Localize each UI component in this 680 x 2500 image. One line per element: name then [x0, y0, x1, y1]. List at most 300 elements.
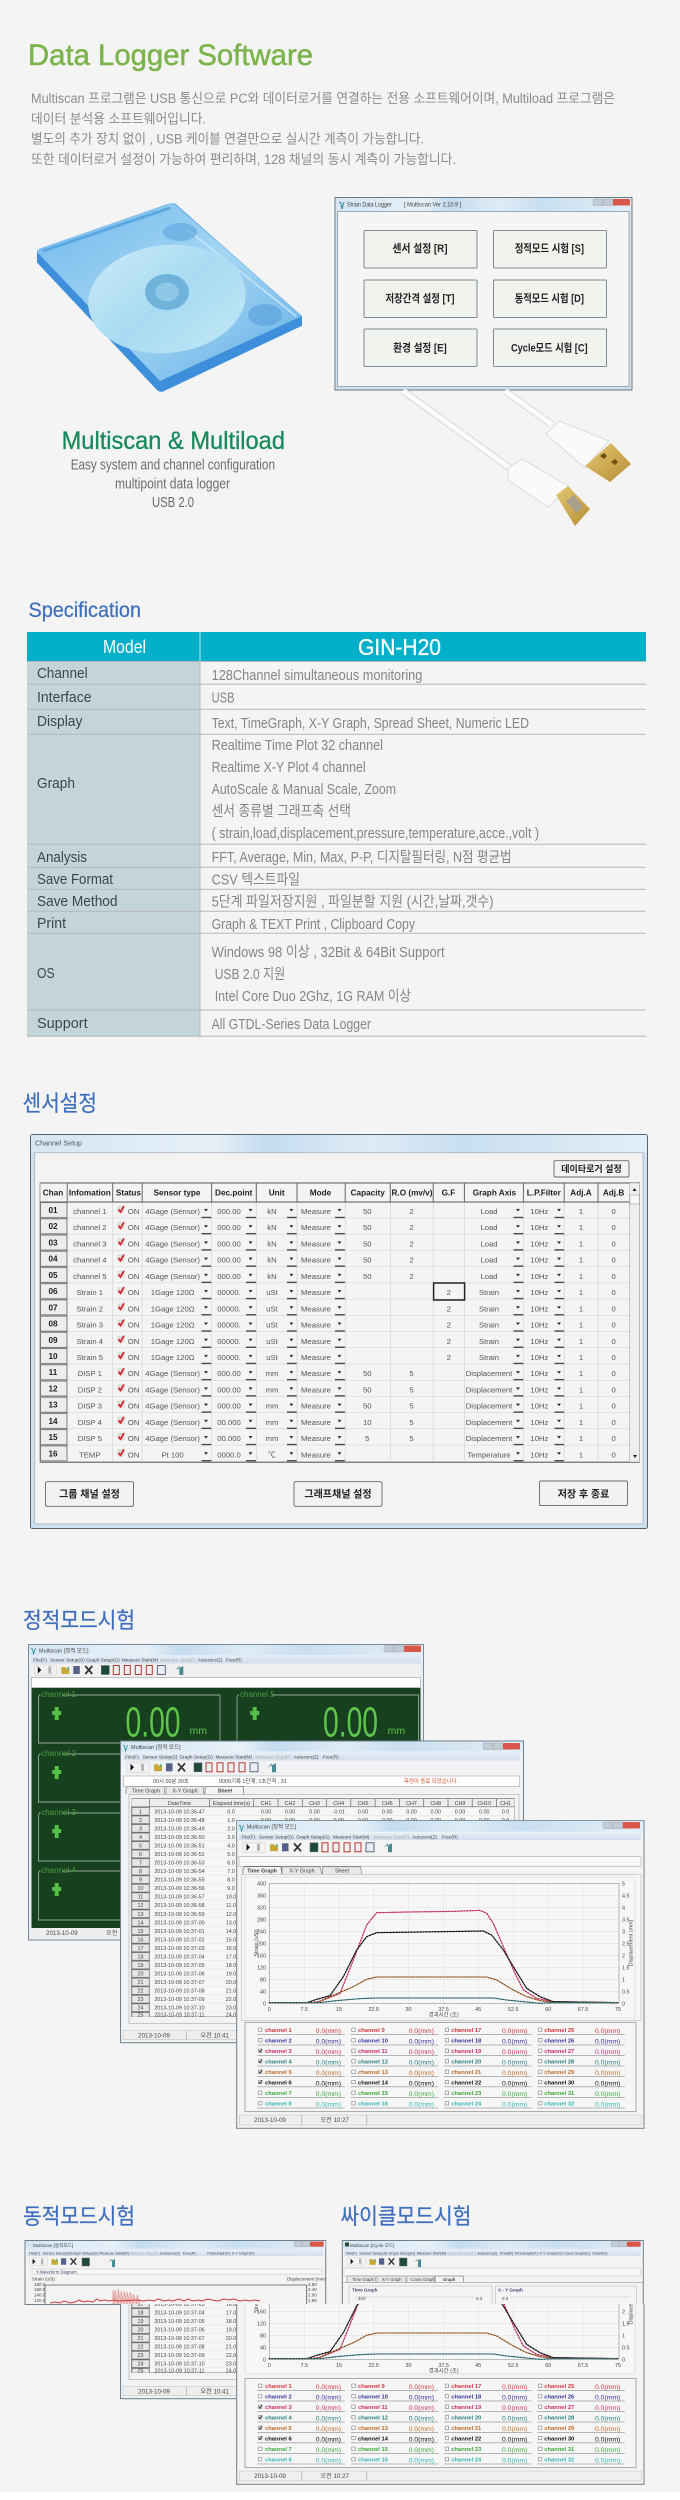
channel rows: 4Gage (Sensor) [145, 1207, 200, 1216]
channel values: 0.0(mm) [316, 2091, 341, 2098]
title bar: Multiscan [정적 모드] [39, 1648, 89, 1654]
table header row: Adj.A [570, 1189, 592, 1198]
sheet header: CH7 [406, 1801, 417, 1807]
channel values: 0.0(mm) [502, 2447, 527, 2454]
channel numbers: 14 [48, 1417, 58, 1426]
sheet rows: 0.00 [285, 1809, 295, 1815]
status bar: 2013-10-09 [138, 2032, 170, 2040]
right axis labels: 0 [622, 2001, 625, 2007]
sheet rows: 12 [138, 1903, 144, 1909]
row labels: Print [37, 916, 66, 932]
channel names: channel 5 [265, 2070, 293, 2076]
channel values: 0.0(mm) [595, 2028, 620, 2035]
left axis labels: 240 [257, 1929, 266, 1935]
menu bar: Measure Start(M) [99, 2251, 130, 2255]
sheet rows: 2013-10-09 10:37-11 [155, 2368, 204, 2374]
row values: All GTDL-Series Data Logger [212, 1017, 371, 1033]
channel names: channel 10 [358, 2038, 388, 2044]
graph group boxes: 0.3 [502, 2296, 509, 2301]
sheet rows: 0.00 [285, 1818, 295, 1824]
channel rows: TEMP [79, 1450, 100, 1459]
status strip: 0000기록 1단계, 1초간격 , 31 [219, 1777, 287, 1785]
right axis labels: 2.5 [622, 1941, 630, 1947]
channel values: 0.0(mm) [409, 2070, 434, 2077]
channel names: channel 18 [451, 2038, 482, 2044]
menu bar: Free(R) [183, 2251, 197, 2255]
left axis labels: 320 [257, 1905, 266, 1911]
channel list panel [245, 2022, 636, 2112]
channel values: 0.0(mm) [409, 2049, 434, 2056]
channel names: channel 5 [240, 1690, 275, 1699]
channel rows: 10Hz [530, 1337, 549, 1346]
channel rows: ON [128, 1304, 139, 1313]
sheet rows: 5.0 [227, 1852, 235, 1858]
channel values: 0.0(mm) [595, 2080, 620, 2087]
right axis labels: 3 [622, 1929, 625, 1935]
channel rows: 10Hz [530, 1288, 549, 1297]
status bar: 오전 10:27 [320, 2472, 350, 2480]
title: Data Logger Software [28, 39, 313, 72]
channel rows: 1 [579, 1304, 583, 1313]
menu bar: Autozero(Z) [294, 1754, 319, 1760]
channel rows: kN [267, 1207, 277, 1216]
sheet rows: 22 [138, 2345, 144, 2351]
heading: sensor setup: 센서설정 [22, 1091, 97, 1116]
toolbar [127, 1762, 276, 1772]
channel values: 0.0(mm) [316, 2028, 341, 2035]
sheet header: CH1 [500, 1801, 511, 1807]
tabs: X-Y Graph [172, 1788, 198, 1794]
channel names: channel 24 [451, 2102, 482, 2108]
sheet rows: 1.0 [227, 1818, 235, 1824]
channel names: channel 24 [451, 2458, 482, 2464]
row labels [37, 666, 118, 1032]
sheet rows: 17 [138, 1946, 144, 1952]
channel rows: 0 [611, 1207, 616, 1216]
x axis labels: 67.5 [578, 2007, 588, 2013]
status strip: 00시 00분 30초 [153, 1778, 189, 1785]
sheet rows: 16.0 [226, 2302, 236, 2308]
sheet rows: 0.00 [382, 1818, 393, 1824]
sheet rows: 17.0 [226, 1954, 236, 1960]
row labels: Channel [37, 666, 88, 682]
channel names [265, 2384, 575, 2464]
channel names: channel 18 [451, 2394, 482, 2400]
row values: 센서 종류별 그래프축 선택 [212, 803, 351, 820]
channel values: 0.0(mm) [316, 2070, 341, 2077]
channel rows: 1Gage 120Ω [151, 1288, 195, 1297]
channel values: 0.0(mm) [502, 2038, 527, 2046]
table header row: Chan [43, 1189, 63, 1198]
channel numbers: 04 [48, 1255, 58, 1264]
sheet rows: 12.0 [226, 1912, 236, 1918]
sheet rows: 2013-10-09 10:37-02 [154, 1937, 205, 1943]
sheet rows: 20 [138, 1972, 144, 1978]
menu bar: Free(R) [442, 1834, 458, 1839]
sheet rows: 4 [139, 1835, 142, 1841]
channel rows: 0 [611, 1385, 616, 1394]
table header row: Status [116, 1189, 141, 1198]
channel rows: 4Gage (Sensor) [145, 1256, 200, 1265]
channel rows: uSt [266, 1337, 279, 1346]
status bar: 2013-10-09 [46, 1930, 78, 1937]
sheet rows: 18.0 [226, 1963, 236, 1969]
channel rows: 2 [447, 1304, 451, 1313]
channel rows: Strain 1 [77, 1288, 103, 1297]
channel rows: Measure [301, 1402, 331, 1411]
channel rows: 00000. [217, 1337, 241, 1346]
y axis title right: Displacement (mm) [629, 1919, 635, 1966]
row values: Realtime Time Plot 32 channel [212, 738, 383, 754]
row labels: Analysis [37, 850, 87, 866]
menu bar [27, 2249, 323, 2256]
channel rows: 2 [409, 1239, 414, 1248]
sheet header: DateTime [168, 1801, 191, 1807]
channel rows: DISP 5 [78, 1434, 102, 1443]
channel names: channel 4 [41, 1866, 77, 1875]
sheet rows: 11.0 [226, 1903, 236, 1909]
channel names: channel 16 [358, 2102, 389, 2108]
menu bar: TimeGraph(T) [207, 2251, 231, 2255]
channel rows: Measure [301, 1288, 331, 1297]
row labels: Save Method [37, 894, 118, 910]
sheet rows: 2013-10-09 10:36-55 [154, 1878, 205, 1884]
channel rows: 50 [363, 1385, 372, 1394]
channel rows: Measure [301, 1353, 331, 1362]
sheet rows: 2013-10-09 10:36-57 [154, 1895, 205, 1901]
waveform axis labels: 160.0 [34, 2287, 46, 2292]
channel names: channel 16 [358, 2458, 389, 2464]
x axis labels: 0 [268, 2007, 271, 2013]
sheet rows: 23 [138, 2353, 144, 2359]
channel rows: Measure [301, 1450, 331, 1459]
row labels: Save Format [37, 872, 113, 888]
product description: USB 2.0 [152, 495, 194, 511]
tabs: Time Graph [247, 1868, 277, 1874]
channel rows: 0 [611, 1353, 616, 1362]
channel rows: Measure [301, 1320, 331, 1330]
sheet panel [129, 1794, 519, 2024]
channel rows: 5 [409, 1418, 414, 1427]
sheet rows: 2013-10-09 10:36-52 [154, 1852, 205, 1858]
sheet rows: 2013-10-09 10:36-49 [154, 1826, 205, 1832]
table header row: Graph Axis [473, 1189, 517, 1198]
sheet rows: 0.0 [502, 1809, 509, 1815]
channel rows: DISP 2 [78, 1385, 102, 1394]
launcher button labels: 동적모드 시험 [D] [515, 291, 584, 305]
row values: Graph & TEXT Print , Clipboard Copy [212, 917, 416, 933]
menu bar: Measure Stop(P) [447, 2251, 477, 2255]
waveform axis labels: 1.60 [308, 2298, 317, 2303]
channel rows: 50 [363, 1369, 372, 1378]
left axis labels: 200 [257, 1941, 266, 1947]
channel values: 0.0(mm) [409, 2394, 434, 2402]
channel rows: DISP 1 [78, 1369, 102, 1378]
channel rows: 10Hz [530, 1402, 549, 1411]
channel values: 0.0(mm) [316, 2436, 341, 2443]
left axis labels: 40 [260, 2345, 266, 2351]
channel rows: Displacement [466, 1418, 513, 1427]
sheet rows: 3 [139, 1826, 142, 1832]
channel rows: Displacement [466, 1402, 513, 1411]
sheet rows: 13.0 [226, 1920, 236, 1926]
table header row: L.P.Filter [527, 1189, 562, 1198]
heading: Specification: Specification [28, 599, 141, 622]
white strip [32, 1678, 420, 1688]
right axis labels: 0.5 [622, 2345, 630, 2351]
row values [212, 668, 539, 1033]
channel rows: Displacement [466, 1385, 513, 1394]
channel rows: Strain [479, 1337, 499, 1346]
channel values: 0.0(mm) [316, 2426, 341, 2433]
y axis title left: Strain (uSt) [254, 1929, 260, 1957]
menu bar: Measure Stop(P) [160, 1657, 196, 1662]
channel names: channel 30 [544, 2436, 574, 2442]
client area [35, 1153, 643, 1524]
waveform axis labels: 120.0 [34, 2298, 46, 2303]
sheet rows: 2013-10-09 10:37-03 [154, 1946, 205, 1952]
sheet rows: 2013-10-09 10:37-08 [154, 2345, 205, 2351]
channel names: channel 19 [451, 2049, 482, 2055]
heading: dynamic mode test: 동적모드시험 [23, 2204, 135, 2229]
channel names: channel 2 [41, 1749, 77, 1758]
channel names: channel 1 [265, 2028, 293, 2034]
channel names: channel 1 [41, 1690, 77, 1699]
channel list panel [245, 2378, 636, 2468]
menu bar: Measure Start(M) [216, 1754, 252, 1760]
launcher client area [338, 212, 629, 386]
channel values: 0.0(mm) [595, 2426, 620, 2433]
channel numbers: 12 [48, 1384, 58, 1393]
channel values: 0.0(mm) [316, 2458, 341, 2464]
channel rows: 10 [363, 1418, 372, 1427]
product name: Multiscan & Multiload [62, 427, 285, 455]
x axis labels: 45 [475, 2007, 481, 2013]
menu bar: Sensor Setup(S) [50, 1657, 85, 1662]
channel rows: 00000. [217, 1288, 241, 1297]
channel numbers: 07 [48, 1303, 58, 1312]
channel values: 0.0(mm) [409, 2447, 434, 2454]
channel rows: 000.00 [217, 1369, 241, 1378]
channel values: 0.0(mm) [502, 2049, 527, 2056]
waveform group box: Displacement (mm) [287, 2276, 327, 2282]
row labels: Support [37, 1016, 88, 1032]
menu bar: Measure Stop(P) [130, 2251, 159, 2255]
intro paragraph: Multiscan 프로그램은 USB 통신으로 PC와 데이터로거를 연결하는 전용 소프트웨어이며, Multiload 프로그램은 [31, 91, 615, 106]
channel rows: ON [128, 1256, 139, 1265]
launcher button labels [386, 241, 588, 354]
channel names: channel 31 [544, 2091, 575, 2097]
sheet rows: 2013-10-09 10:36-53 [154, 1860, 205, 1866]
toolbar [348, 2258, 421, 2267]
channel rows: 0 [611, 1320, 616, 1330]
channel names: channel 3 [265, 2405, 293, 2411]
channel names: channel 31 [544, 2447, 575, 2453]
status bar [239, 2471, 641, 2481]
channel rows: Displacement [466, 1369, 513, 1378]
status bar: 오전 [106, 1929, 118, 1937]
channel values: 0.0(mm) [316, 2060, 341, 2066]
sheet rows: 9.0 [227, 1886, 235, 1892]
x axis labels: 75 [615, 2363, 621, 2369]
sheet rows: 16 [138, 1937, 144, 1943]
menu bar: Free(R) [500, 2251, 514, 2255]
channel numbers: 13 [48, 1401, 58, 1410]
channel rows: 2 [447, 1337, 451, 1346]
sheet rows: 0.00 [455, 1809, 465, 1815]
channel rows: channel 5 [73, 1272, 106, 1281]
channel names: channel 14 [358, 2080, 389, 2086]
x axis labels: 7.5 [300, 2363, 308, 2369]
LED units [190, 1728, 404, 1734]
channel rows: Temperature [467, 1450, 511, 1459]
channel names: channel 7 [265, 2447, 292, 2453]
channel names: channel 26 [544, 2038, 575, 2044]
table header: GIN-H20 [358, 634, 441, 660]
right axis labels: 3.5 [622, 1917, 630, 1923]
sheet rows: 11 [138, 1895, 143, 1901]
table header row: Sensor type [154, 1189, 201, 1198]
channel rows: uSt [266, 1353, 279, 1362]
right axis labels: 4.5 [622, 1893, 630, 1899]
sheet rows: 24.0 [226, 2012, 236, 2018]
channel values: 0.0(mm) [316, 2447, 341, 2454]
channel values: 0.0(mm) [502, 2102, 527, 2108]
channel rows: ON [128, 1272, 139, 1281]
sheet rows: 20 [138, 2328, 144, 2334]
channel names: channel 17 [451, 2028, 481, 2034]
sheet rows: 2013-10-09 10:36-48 [154, 1818, 205, 1824]
channel rows: 1 [579, 1402, 583, 1411]
sheet header: CH3 [309, 1801, 320, 1807]
x axis labels: 22.5 [368, 2007, 379, 2013]
sheet rows: 2013-10-09 10:37-09 [154, 1997, 205, 2003]
menu bar: Measure Start(M) [417, 2251, 447, 2255]
sheet rows: 2013-10-09 10:36-59 [154, 1912, 205, 1918]
x axis title: 경과시간 (초) [429, 2366, 459, 2374]
menu bar: Sensor Setup(S) [43, 2251, 72, 2255]
row labels: Graph [37, 776, 75, 792]
menu bar: Graph Setup(G) [86, 1657, 120, 1662]
channel rows: 2 [409, 1207, 414, 1216]
channel names: channel 2 [265, 2038, 292, 2044]
sheet rows: 2013-10-09 10:37-00 [154, 1920, 205, 1926]
sheet rows: 22 [138, 1989, 144, 1995]
channel rows: Load [480, 1239, 498, 1248]
menu bar: File(F) [346, 2251, 358, 2255]
channel rows: 000.00 [217, 1256, 241, 1265]
channel rows: 10Hz [530, 1272, 549, 1281]
channel rows: 0 [611, 1369, 616, 1378]
right axis labels: 2 [622, 2309, 625, 2315]
menu bar [123, 1752, 520, 1760]
channel rows: 5 [409, 1434, 414, 1443]
sheet rows: 2013-10-09 10:36-47 [154, 1809, 205, 1815]
channel names: channel 20 [451, 2060, 481, 2066]
sheet rows: 2013-10-09 10:36-54 [154, 1869, 205, 1875]
row values: USB 2.0 지원 [215, 966, 285, 983]
channel names: channel 9 [358, 2028, 386, 2034]
menu bar [344, 2249, 641, 2256]
channel values: 0.0(mm) [595, 2384, 620, 2391]
menu bar: File(F) [33, 1657, 47, 1662]
channel rows: 000.00 [217, 1207, 241, 1216]
product description: Easy system and channel configuration [71, 458, 275, 474]
menu bar: X-Y Graph(X) [232, 2251, 255, 2255]
waveform axis labels [34, 2282, 317, 2303]
tabs: Time Graph [352, 2277, 375, 2282]
channel values: 0.0(mm) [595, 2394, 620, 2402]
channel rows: Load [480, 1256, 498, 1265]
row labels: OS [37, 966, 55, 982]
channel rows: 50 [363, 1223, 372, 1232]
channel rows: 00.000 [217, 1434, 241, 1443]
channel rows: channel 2 [73, 1223, 106, 1232]
sheet rows: 16.0 [226, 1946, 236, 1952]
channel values: 0.0(mm) [595, 2458, 620, 2464]
status bar [46, 1930, 117, 1936]
intro paragraph: 별도의 추가 장치 없이 , USB 케이블 연결만으로 실시간 계측이 가능합니다. [31, 132, 424, 146]
channel numbers: 10 [48, 1352, 58, 1361]
sheet rows: 2013-10-09 10:37-04 [154, 1954, 205, 1960]
sheet rows: 0.00 [333, 1818, 344, 1824]
sheet rows: 2013-10-09 10:37-07 [154, 2336, 205, 2342]
window: digital meters [28, 1644, 424, 1940]
channel names: channel 23 [451, 2091, 482, 2097]
menu bar: Autozero(Z) [477, 2251, 498, 2255]
channel values: 0.0(mm) [409, 2436, 434, 2443]
launcher title bar [336, 198, 631, 211]
LED units: mm [388, 1726, 405, 1737]
channel rows: 1 [579, 1207, 583, 1216]
sheet rows: 14.0 [226, 1929, 236, 1935]
y axis title left: Strain [254, 2299, 260, 2313]
waveform axis labels: 2.00 [308, 2292, 317, 2298]
sheet rows: 0.00 [479, 1818, 490, 1824]
sheet rows: 6.0 [227, 1860, 235, 1866]
tabs [126, 1786, 244, 1794]
channel values: 0.0(mm) [409, 2091, 434, 2098]
channel rows: 10Hz [530, 1450, 549, 1459]
sheet rows: 0.00 [309, 1818, 320, 1824]
channel rows: 000.00 [217, 1223, 241, 1232]
sheet rows: 19 [138, 2319, 144, 2325]
channel rows: 0 [611, 1418, 616, 1427]
channel rows: 10Hz [530, 1418, 549, 1427]
status bar: 2013-10-09 [254, 2117, 286, 2124]
channel values: 0.0(mm) [502, 2426, 527, 2433]
title bar [26, 2241, 326, 2249]
channel rows: Measure [301, 1207, 331, 1216]
channel rows: uSt [266, 1304, 279, 1313]
channel rows: Displacement [466, 1434, 513, 1443]
sheet header: CH8 [430, 1801, 441, 1807]
channel rows: 10Hz [530, 1256, 549, 1265]
sheet rows: 2 [139, 1818, 142, 1824]
channel names: channel 1 [265, 2384, 293, 2390]
channel values: 0.0(mm) [316, 2038, 341, 2046]
sheet rows: 0.00 [431, 1809, 441, 1815]
channel rows: ON [128, 1288, 139, 1297]
channel rows: 0 [611, 1434, 616, 1443]
table header: Model [103, 637, 146, 657]
channel rows: ℃ [268, 1450, 276, 1459]
channel names: channel 23 [451, 2447, 482, 2453]
sheet rows: 2013-10-09 10:37-01 [154, 1929, 205, 1935]
sheet rows: 18.0 [226, 2319, 236, 2325]
launcher buttons [364, 230, 606, 366]
x axis labels: 30 [406, 2007, 412, 2013]
